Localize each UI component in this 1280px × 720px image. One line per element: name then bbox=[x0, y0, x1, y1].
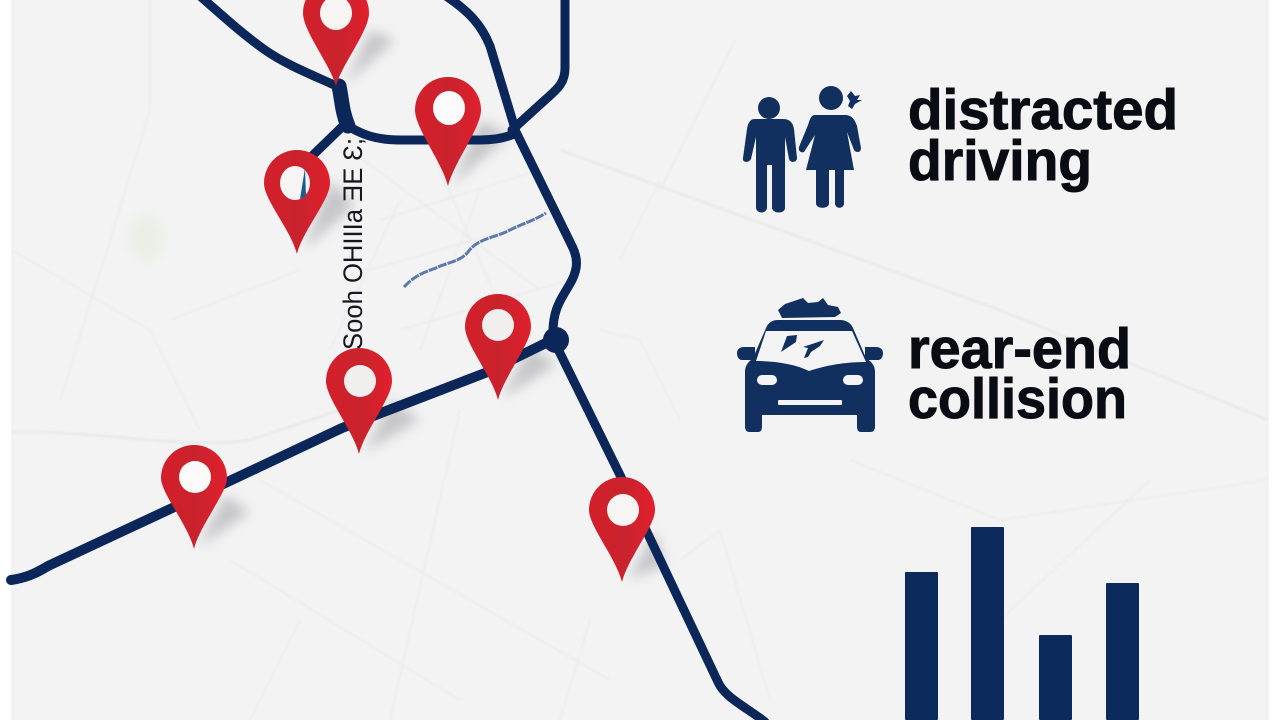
label: rear-end collision: rear-end bbox=[908, 317, 1131, 381]
road: connector to junction bbox=[339, 86, 348, 126]
pin 4 bbox=[465, 294, 531, 400]
road: southwest diagonal bbox=[11, 340, 552, 580]
icon: man bbox=[743, 97, 797, 212]
pin shadows bbox=[198, 30, 665, 580]
road: north-south artery bbox=[446, 0, 576, 336]
pin 3 bbox=[264, 150, 330, 254]
pin 6 bbox=[161, 445, 227, 549]
car body bbox=[745, 320, 875, 432]
road: northwest branch bbox=[200, 0, 332, 84]
car windshield bbox=[756, 331, 866, 371]
pin 1 bbox=[303, 0, 369, 86]
pin 2 bbox=[415, 77, 481, 186]
icon: distraction spark bbox=[847, 91, 862, 109]
label: distracted driving: driving bbox=[908, 129, 1092, 193]
pin 5 bbox=[326, 348, 392, 454]
icon: woman bbox=[799, 86, 861, 208]
pin 7 bbox=[589, 477, 655, 582]
label: distracted driving bbox=[908, 78, 1178, 193]
car headlights and grille bbox=[757, 375, 863, 405]
road network bbox=[11, 0, 765, 720]
rotated street label: Sooh OHIIIa ƎE Ɛ; bbox=[338, 138, 368, 350]
bar 1 bbox=[905, 572, 938, 720]
road: northeast branch bbox=[512, 0, 565, 130]
bar 2 bbox=[971, 527, 1004, 720]
icon: damaged car bbox=[737, 298, 883, 432]
car mirrors bbox=[737, 347, 883, 360]
label: rear-end collision: collision bbox=[908, 367, 1127, 431]
bar chart bbox=[905, 527, 1139, 720]
road: central junction bbox=[543, 327, 569, 353]
bar 3 bbox=[1039, 635, 1072, 720]
car roof debris bbox=[778, 298, 841, 318]
road: east-west link bbox=[312, 124, 514, 156]
bar 4 bbox=[1106, 583, 1139, 720]
label: rear-end collision bbox=[908, 317, 1131, 431]
blue side street bbox=[404, 213, 546, 287]
road: southbound artery bbox=[556, 345, 765, 720]
label: distracted driving: distracted bbox=[908, 78, 1178, 142]
windshield cracks bbox=[781, 335, 824, 358]
icon: people, distracted driving bbox=[743, 86, 862, 212]
